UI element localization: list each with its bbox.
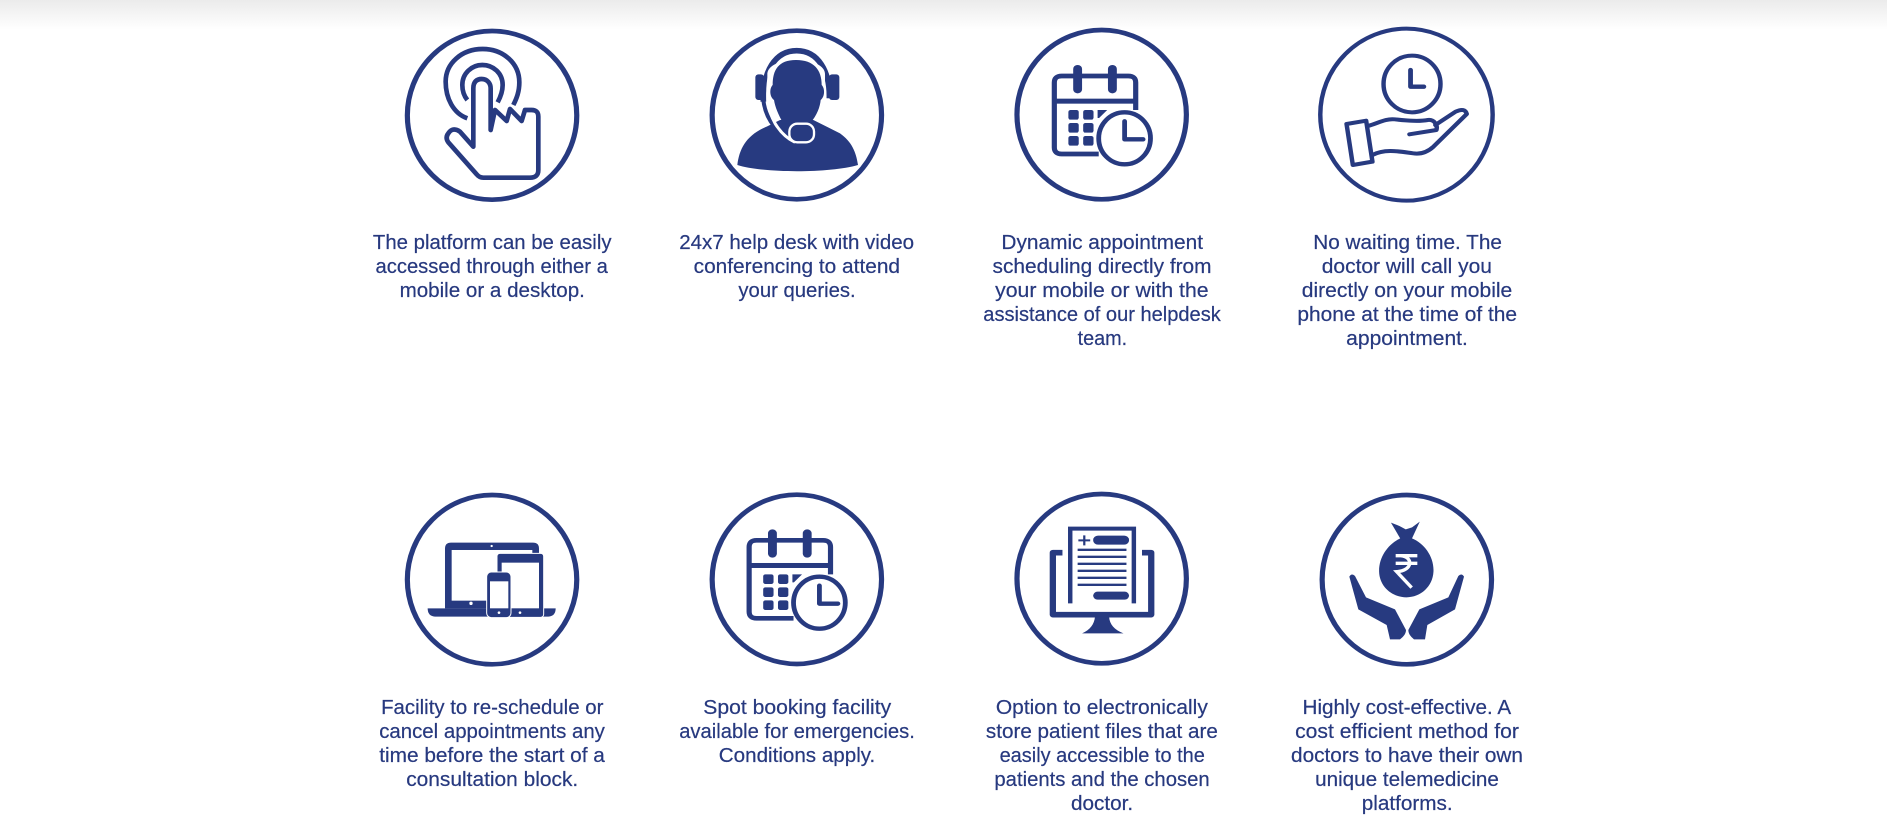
text: no waiting: phone at the time of the [1297, 304, 1517, 326]
text: help desk [679, 232, 914, 302]
text: patient files: store patient files that are [986, 721, 1218, 743]
text: spot booking: available for emergencies. [679, 721, 915, 743]
feature: easy access [373, 31, 612, 302]
text: re-schedule: consultation block. [406, 769, 578, 791]
text: dynamic scheduling: team. [1078, 328, 1127, 350]
text: patient files: patients and the chosen [994, 769, 1210, 791]
text: easy access: The platform can be easily [373, 232, 612, 254]
text: easy access: accessed through either a [376, 256, 608, 278]
icon: calendar with clock [712, 495, 882, 664]
text: cost-effective: cost efficient method for [1295, 721, 1519, 743]
text: re-schedule [379, 697, 605, 791]
icon: clock over open hand [1320, 29, 1493, 201]
text: cost-effective: unique telemedicine [1315, 769, 1499, 791]
feature: patient files [986, 494, 1218, 815]
top shadow band [0, 0, 1887, 30]
text: spot booking: Spot booking facility [703, 697, 892, 719]
text: patient files: easily accessible to the [1000, 745, 1205, 767]
text: cost-effective [1291, 697, 1523, 815]
icon: medical document on monitor [1017, 494, 1186, 663]
text: cost-effective: doctors to have their own [1291, 745, 1523, 767]
text: patient files: Option to electronically [996, 697, 1208, 719]
text: spot booking [679, 697, 915, 767]
text: dynamic scheduling: Dynamic appointment [1001, 232, 1203, 254]
text: patient files: doctor. [1071, 793, 1133, 815]
icon: laptop tablet phone [407, 495, 577, 664]
feature: re-schedule [379, 495, 605, 791]
text: dynamic scheduling: scheduling directly from [993, 256, 1212, 278]
icon: calendar with clock [1017, 30, 1186, 199]
text: re-schedule: cancel appointments any [379, 721, 605, 743]
icon: support agent headset [712, 31, 882, 199]
feature: help desk [679, 31, 914, 302]
text: re-schedule: Facility to re-schedule or [381, 697, 603, 719]
text: help desk: conferencing to attend [694, 256, 900, 278]
top row features (right pair) [983, 29, 1517, 350]
top row features (left pair) [373, 31, 914, 302]
text: spot booking: Conditions apply. [719, 745, 875, 767]
text: no waiting: directly on your mobile [1302, 280, 1512, 302]
feature: no waiting [1297, 29, 1517, 350]
text: easy access: mobile or a desktop. [400, 280, 585, 302]
text: no waiting: appointment. [1346, 328, 1468, 350]
feature: cost-effective [1291, 495, 1523, 815]
text: no waiting: doctor will call you [1322, 256, 1492, 278]
bottom row features (right pair) [986, 494, 1523, 815]
text: no waiting [1297, 232, 1517, 350]
text: cost-effective: platforms. [1362, 793, 1453, 815]
text: help desk: 24x7 help desk with video [679, 232, 914, 254]
text: dynamic scheduling [983, 232, 1221, 350]
text: cost-effective: Highly cost-effective. A [1303, 697, 1512, 719]
icon: hands holding rupee bag [1322, 495, 1492, 664]
text: help desk: your queries. [738, 280, 856, 302]
feature: dynamic scheduling [983, 30, 1221, 350]
icon: tapping hand [407, 31, 577, 200]
text: patient files [986, 697, 1218, 815]
text: re-schedule: time before the start of a [379, 745, 605, 767]
bottom row features (left pair) [379, 495, 915, 791]
feature: spot booking [679, 495, 915, 767]
text: easy access [373, 232, 612, 302]
text: no waiting: No waiting time. The [1313, 232, 1502, 254]
text: dynamic scheduling: assistance of our helpdesk [983, 304, 1221, 326]
text: dynamic scheduling: your mobile or with the [995, 280, 1209, 302]
